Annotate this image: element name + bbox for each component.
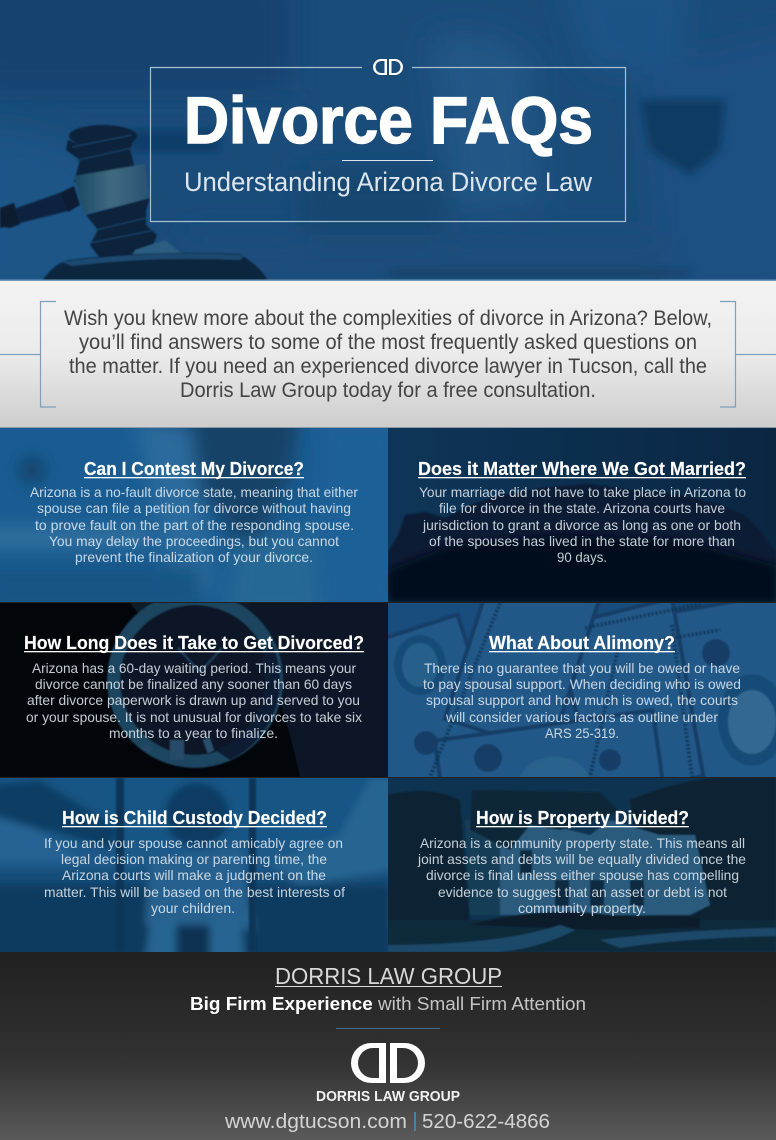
question: What About Alimony?	[489, 633, 675, 653]
question: How is Child Custody Decided?	[62, 808, 327, 828]
answer: to pay spousal support. When deciding who is owed	[423, 676, 741, 692]
answer	[30, 484, 358, 565]
answer: of the spouses has lived in the state for more than	[429, 533, 735, 549]
contact line	[224, 1111, 550, 1133]
intro text: the matter. If you need an experienced divorce lawyer in Tucson, call the	[69, 355, 707, 378]
answer: your children.	[151, 900, 235, 916]
answer: ARS 25-319.	[545, 725, 619, 741]
logo wordmark: DORRIS LAW GROUP	[316, 1089, 460, 1105]
panel: introduction	[0, 281, 776, 428]
answer	[44, 835, 345, 916]
answer: months to a year to finalize.	[109, 725, 278, 741]
intro text	[64, 307, 712, 402]
answer	[423, 660, 741, 741]
answer	[419, 484, 746, 565]
answer	[417, 835, 746, 916]
intro text: you’ll find answers to some of the most frequently asked questions on	[79, 331, 697, 354]
panel: How is Child Custody Decided	[0, 778, 388, 952]
panel: How Long Does it Take	[0, 592, 388, 777]
answer: legal decision making or parenting time, the	[61, 851, 327, 867]
answer: spouse can file a petition for divorce without having	[37, 500, 351, 516]
panel: header	[0, 0, 776, 300]
answer: Your marriage did not have to take place in Arizona to	[419, 484, 746, 500]
answer: jurisdiction to grant a divorce as long as one or both	[422, 517, 741, 533]
answer: will consider various factors as outline under	[445, 709, 718, 725]
question: How Long Does it Take to Get Divorced?	[24, 633, 364, 653]
answer: Arizona is a community property state. This means all	[420, 835, 745, 851]
answer: prevent the finalization of your divorce.	[75, 549, 313, 565]
question: Does it Matter Where We Got Married?	[418, 459, 746, 479]
icon: DD logo	[351, 1043, 425, 1083]
panel: What About Alimony	[388, 603, 776, 777]
answer: 90 days.	[557, 549, 607, 565]
intro text: Wish you knew more about the complexities of divorce in Arizona? Below,	[64, 307, 712, 330]
answer: Arizona has a 60-day waiting period. This means your	[32, 660, 356, 676]
answer: Arizona courts will make a judgment on the	[62, 867, 326, 883]
photo: upset woman	[0, 428, 388, 602]
photo: parent and child	[0, 778, 388, 952]
brackets	[0, 302, 776, 407]
answer: You may delay the proceedings, but you cannot	[49, 533, 339, 549]
photo: wristwatch	[0, 592, 388, 777]
answer: file for divorce in the state. Arizona courts have	[439, 500, 725, 516]
answer: to prove fault on the part of the responding spouse.	[35, 517, 354, 533]
answer	[26, 660, 362, 741]
answer: There is no guarantee that you will be owed or have	[424, 660, 740, 676]
panel: How is Property Divided	[388, 776, 776, 952]
contact line: 520-622-4866	[422, 1111, 550, 1133]
answer: If you and your spouse cannot amicably agree on	[44, 835, 343, 851]
tagline: Big Firm Experience with Small Firm Attention	[190, 993, 586, 1014]
title: Divorce FAQs	[184, 83, 593, 157]
panel: Can I Contest My Divorce	[0, 428, 388, 602]
answer: after divorce paperwork is drawn up and served to you	[27, 692, 360, 708]
intro text: Dorris Law Group today for a free consultation.	[180, 379, 596, 402]
photo: dollar bills	[388, 603, 776, 777]
contact line: www.dgtucson.com	[224, 1111, 407, 1133]
icon: small DD logo	[373, 59, 403, 75]
photo: house at dusk	[388, 776, 776, 952]
answer: Arizona is a no-fault divorce state, meaning that either	[30, 484, 358, 500]
panel: footer	[0, 952, 776, 1140]
answer: community property.	[518, 900, 646, 916]
answer: or your spouse. It is not unusual for divorces to take six	[26, 709, 362, 725]
icon: gavel	[0, 125, 268, 281]
firm name: DORRIS LAW GROUP	[275, 963, 502, 989]
answer: spousal support and how much is owed, the courts	[426, 692, 738, 708]
title frame	[150, 68, 626, 222]
photo: desert mountain	[388, 428, 776, 602]
panel: Does it Matter Where We Got Married	[388, 428, 776, 602]
question: How is Property Divided?	[476, 808, 689, 828]
answer: joint assets and debts will be equally divided once the	[417, 851, 746, 867]
answer: evidence to suggest that an asset or debt is not	[438, 884, 727, 900]
question: Can I Contest My Divorce?	[84, 459, 304, 479]
subtitle: Understanding Arizona Divorce Law	[184, 167, 592, 197]
answer: divorce cannot be finalized any sooner than 60 days	[35, 676, 352, 692]
answer: matter. This will be based on the best interests of	[44, 884, 345, 900]
header photo: blurred couple and gavel	[0, 0, 776, 300]
answer: divorce is final unless either spouse has compelling	[426, 867, 739, 883]
